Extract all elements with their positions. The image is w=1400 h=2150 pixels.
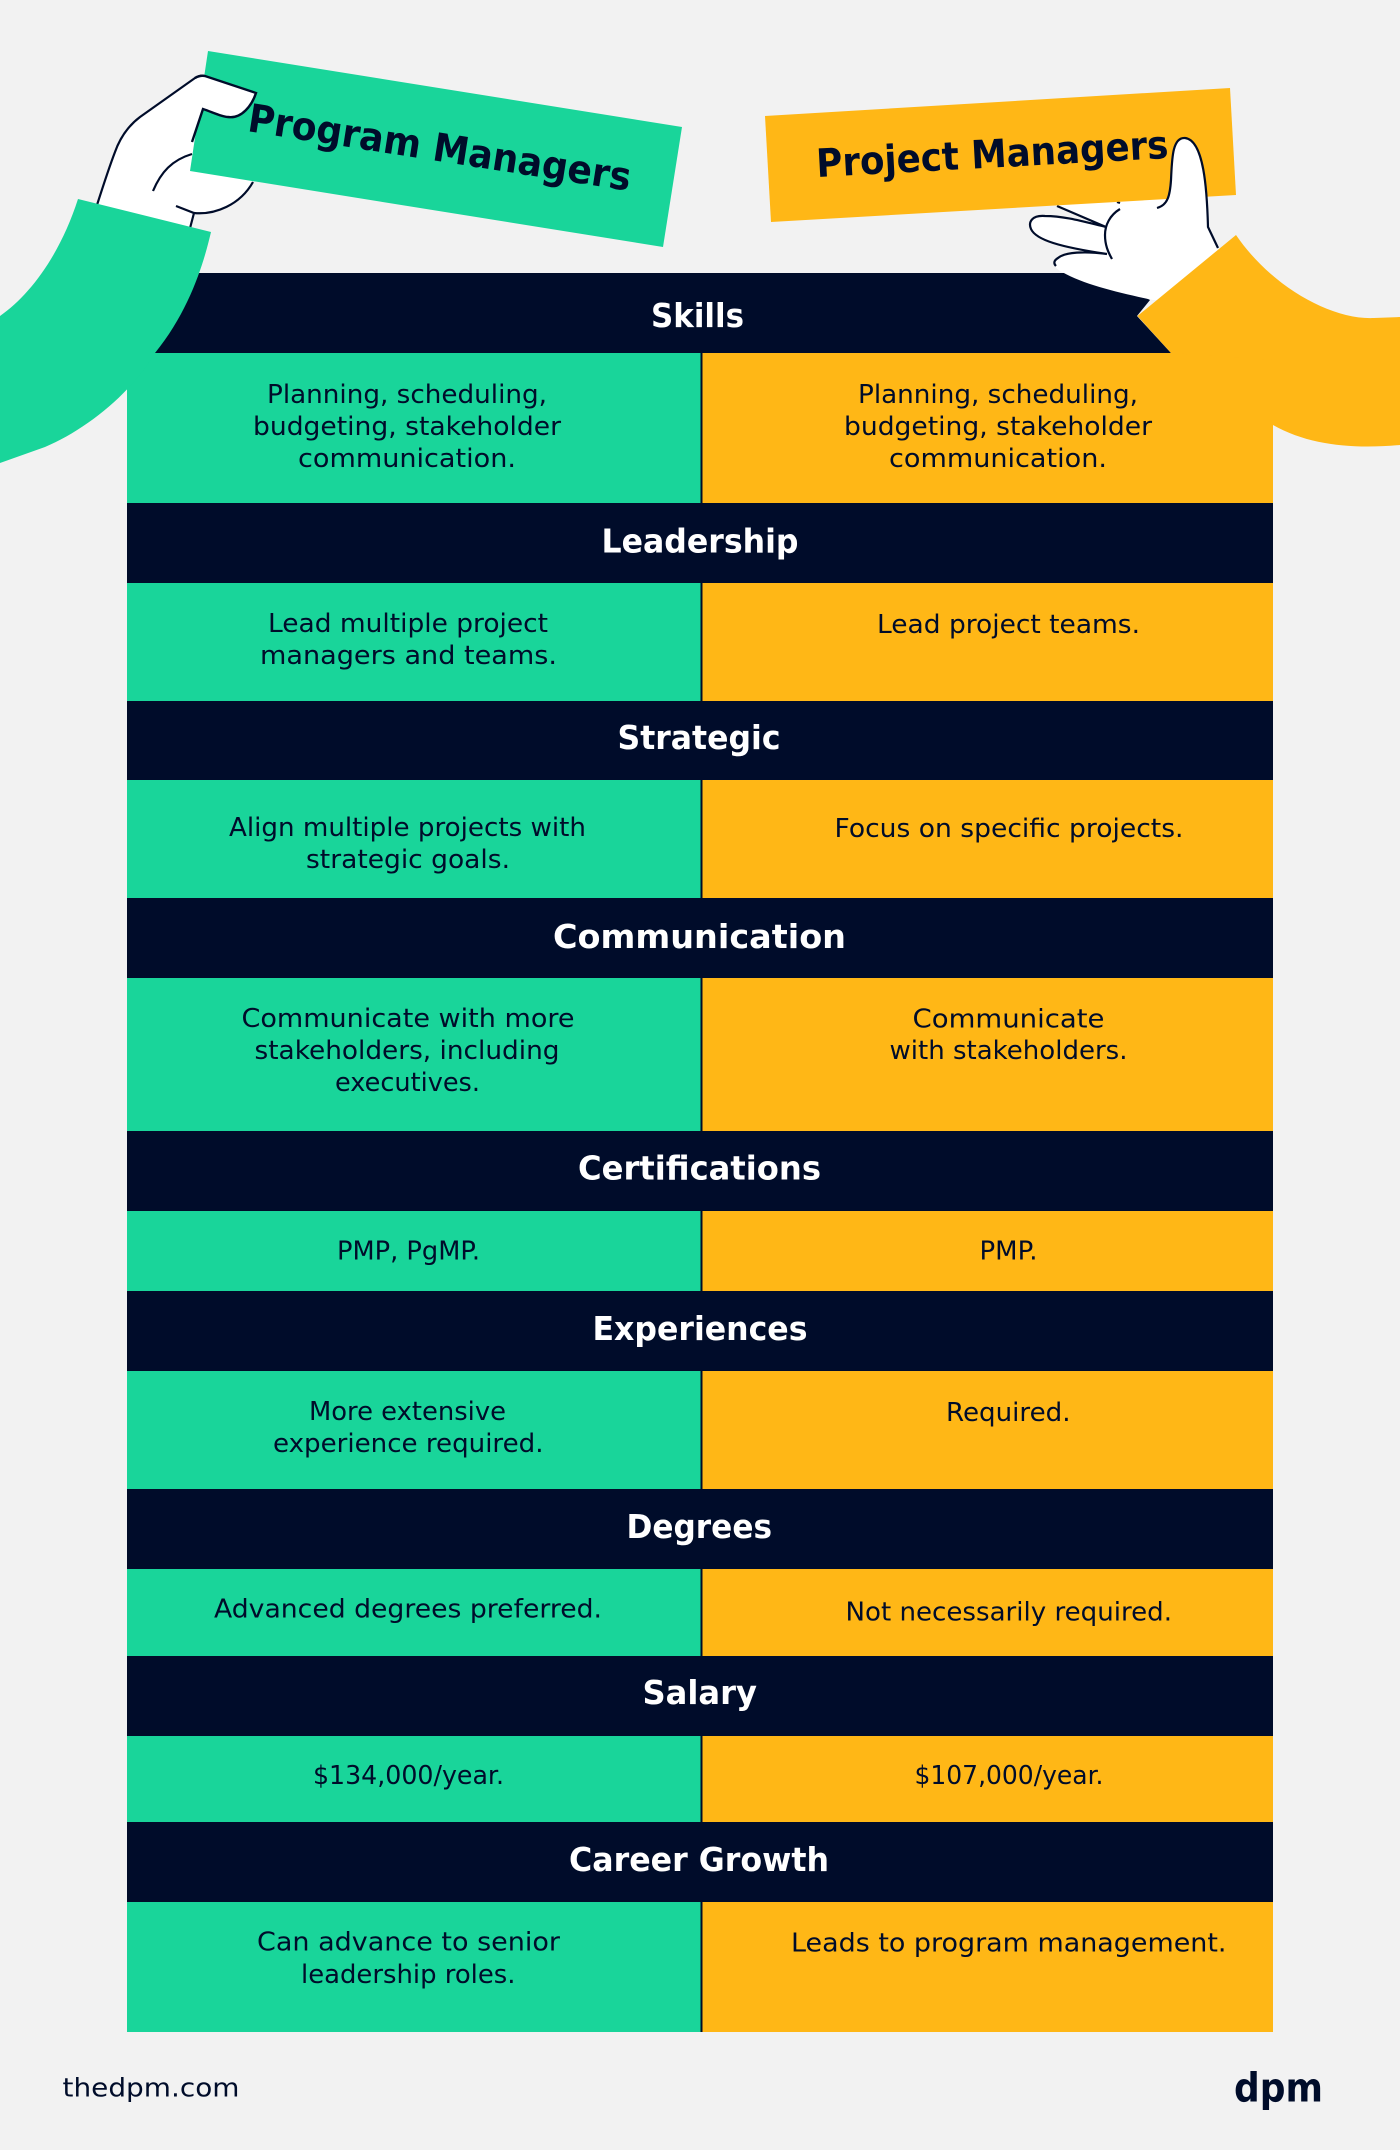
row: communication: Communicate with more bbox=[242, 1004, 574, 1034]
icon: left thumb over label bbox=[190, 76, 256, 142]
row: experiences: More extensive bbox=[309, 1397, 506, 1427]
label: Program Managers: Program Managers bbox=[245, 96, 634, 201]
row: salary bbox=[127, 1656, 1273, 1822]
row: degrees: Advanced degrees preferred. bbox=[214, 1594, 602, 1624]
row: career growth: Leads to program management. bbox=[791, 1928, 1226, 1958]
row: certifications: Certifications bbox=[578, 1148, 821, 1188]
comparison table bbox=[127, 273, 1273, 2032]
row: communication: executives. bbox=[335, 1068, 480, 1098]
row: leadership: Leadership bbox=[602, 522, 798, 560]
icon: right hand bbox=[1030, 190, 1240, 300]
row: strategic bbox=[127, 701, 1273, 898]
row: communication: Communicate bbox=[912, 1004, 1104, 1034]
row: skills: communication. bbox=[298, 444, 516, 474]
row: strategic: Strategic bbox=[618, 718, 780, 757]
row: skills: budgeting, stakeholder bbox=[253, 412, 561, 442]
row: salary: Salary bbox=[642, 1673, 757, 1712]
row: leadership: managers and teams. bbox=[260, 641, 557, 671]
icon: left hand holding label bbox=[97, 76, 256, 232]
row: leadership: Lead multiple project bbox=[268, 609, 548, 639]
row: degrees: Not necessarily required. bbox=[846, 1598, 1172, 1628]
label: Program Managers bbox=[190, 51, 682, 247]
row: leadership: Lead project teams. bbox=[877, 610, 1140, 640]
footer: dpm logo: dpm bbox=[1234, 2066, 1323, 2112]
row: salary: $107,000/year. bbox=[914, 1761, 1104, 1791]
sleeve: green left arm bbox=[0, 199, 211, 463]
label: Project Managers: Project Managers bbox=[815, 123, 1170, 187]
row: skills bbox=[127, 273, 1273, 503]
row: degrees: Degrees bbox=[626, 1507, 772, 1546]
row: salary: $134,000/year. bbox=[313, 1761, 504, 1791]
row: experiences: Required. bbox=[946, 1398, 1070, 1428]
row: skills: Skills bbox=[651, 296, 744, 335]
row: strategic: Align multiple projects with bbox=[229, 813, 586, 843]
row: career growth: Can advance to senior bbox=[257, 1928, 560, 1958]
row: communication: stakeholders, including bbox=[254, 1036, 560, 1066]
row: experiences: experience required. bbox=[273, 1429, 544, 1459]
sleeve: yellow right arm bbox=[1138, 235, 1400, 447]
row: career growth: leadership roles. bbox=[301, 1960, 516, 1990]
row: strategic: Focus on specific projects. bbox=[834, 814, 1184, 844]
row: skills: Planning, scheduling, bbox=[858, 380, 1138, 410]
row: career growth bbox=[127, 1822, 1273, 2032]
row: communication bbox=[127, 898, 1273, 1131]
label: Project Managers bbox=[765, 88, 1236, 222]
row: career growth: Career Growth bbox=[569, 1840, 829, 1879]
footer: website: thedpm.com bbox=[62, 2074, 240, 2104]
row: leadership bbox=[127, 503, 1273, 701]
row: experiences: Experiences bbox=[592, 1309, 808, 1348]
row: certifications: PMP, PgMP. bbox=[337, 1236, 480, 1266]
row: skills: budgeting, stakeholder bbox=[844, 412, 1152, 442]
row: degrees bbox=[127, 1489, 1273, 1656]
row: skills: Planning, scheduling, bbox=[267, 380, 547, 410]
row: certifications: PMP. bbox=[980, 1236, 1038, 1266]
row: communication: with stakeholders. bbox=[890, 1036, 1128, 1066]
row: experiences bbox=[127, 1291, 1273, 1489]
row: skills: communication. bbox=[889, 444, 1107, 474]
icon: right index finger over label bbox=[1157, 138, 1218, 250]
row: certifications bbox=[127, 1131, 1273, 1291]
row: communication: Communication bbox=[553, 917, 846, 956]
row: strategic: strategic goals. bbox=[306, 845, 510, 875]
